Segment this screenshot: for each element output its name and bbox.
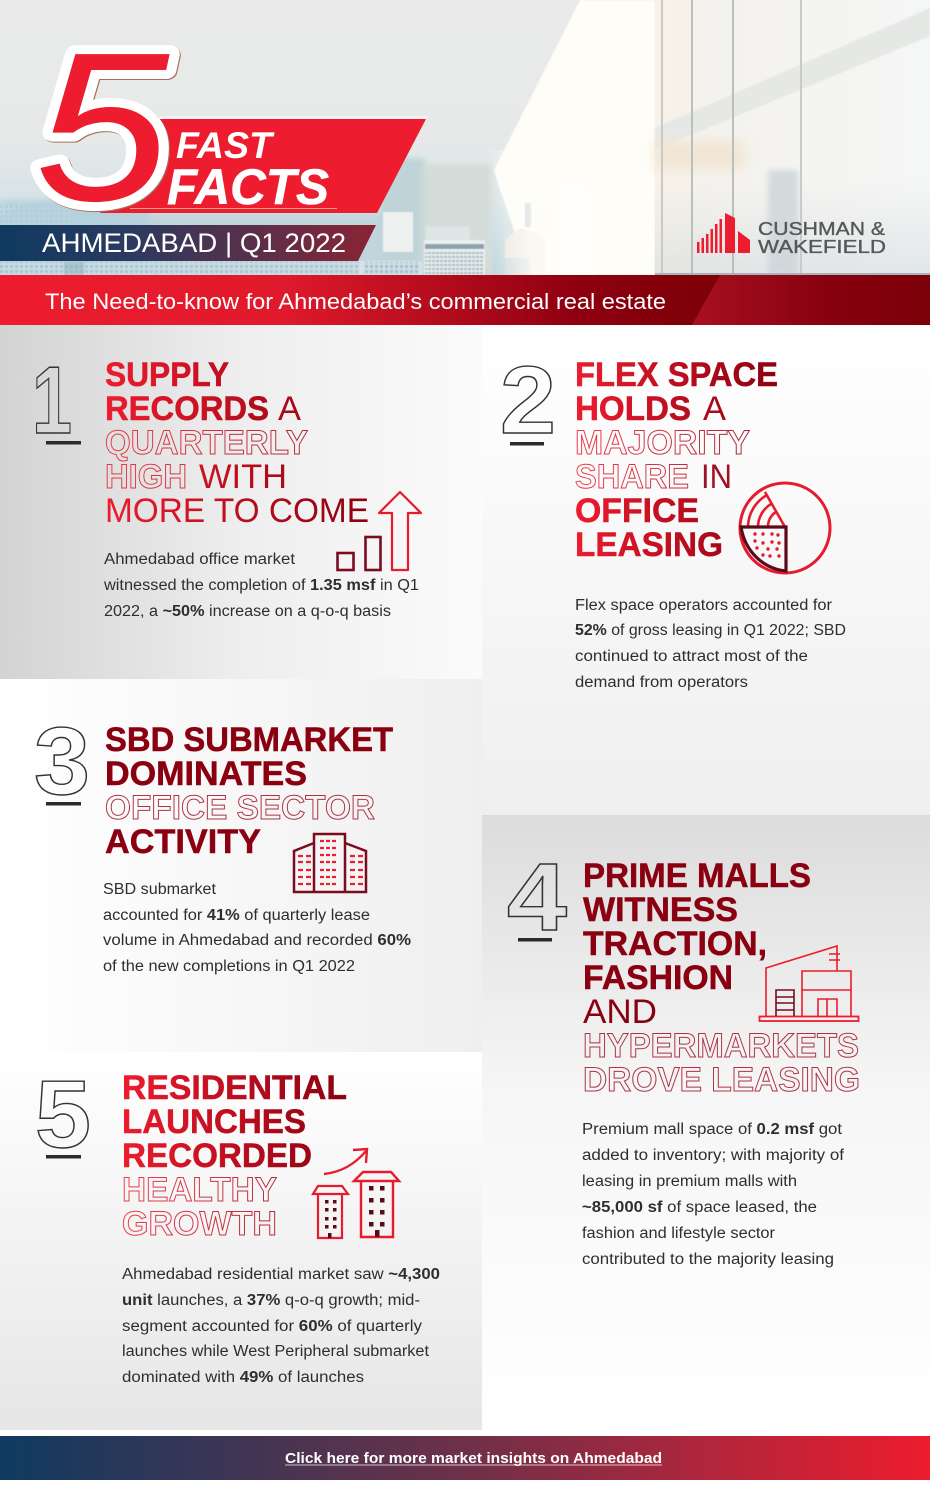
ribbon highlight [158, 116, 428, 119]
body text: leasing in premium malls with [582, 1173, 797, 1190]
heading: HIGH [105, 458, 187, 496]
heading: fast: FAST [176, 125, 275, 166]
heading: SHARE [575, 458, 689, 496]
heading: PRIME MALLS [583, 857, 811, 895]
number 4: 4 [507, 844, 567, 951]
heading: HYPERMARKETS [583, 1027, 859, 1065]
panel: fact 5 [0, 1052, 482, 1430]
subtitle bar: The Need-to-know for Ahmedabad’s commercial real estate [45, 289, 666, 314]
ribbon rule [130, 208, 337, 209]
heading: A [278, 390, 301, 428]
heading: FASHION [583, 959, 733, 997]
body text: 52% of gross leasing in Q1 2022; SBD [575, 622, 846, 639]
sunlit diagonal wall [494, 0, 655, 275]
body text: Premium mall space of 0.2 msf got [582, 1121, 843, 1138]
heading: ACTIVITY [105, 823, 261, 861]
city and quarter band: AHMEDABAD | Q1 2022 [42, 228, 346, 258]
number 5: 5 [35, 1061, 91, 1168]
body text: continued to attract most of the [575, 648, 808, 665]
heading: WITNESS [583, 891, 738, 929]
heading: WITH [199, 458, 287, 496]
heading: OFFICE SECTOR [105, 789, 375, 827]
body text: Flex space operators accounted for [575, 597, 832, 614]
heading: FLEX SPACE [575, 356, 778, 394]
heading: HOLDS [575, 390, 691, 428]
body text: Ahmedabad office market [104, 551, 296, 568]
big numeral 5: 5 [35, 8, 170, 245]
heading [583, 857, 860, 1099]
logo: cushman and wakefield [697, 213, 886, 257]
number 2: 2 [500, 347, 556, 454]
icon: office building [294, 834, 366, 892]
heading: facts: FACTS [167, 159, 329, 215]
heading: DOMINATES [105, 755, 307, 793]
body text: accounted for 41% of quarterly lease [103, 907, 370, 924]
heading: QUARTERLY [105, 424, 308, 462]
heading [105, 356, 369, 530]
body text: 2022, a ~50% increase on a q-o-q basis [104, 603, 391, 620]
body text: fashion and lifestyle sector [582, 1225, 775, 1242]
red ribbon [100, 119, 426, 213]
city and quarter band [0, 225, 376, 261]
heading [122, 1069, 347, 1243]
heading: IN [701, 458, 732, 496]
body text [575, 597, 846, 691]
office window wall [655, 0, 930, 275]
heading: LAUNCHES [122, 1103, 306, 1141]
sun fade [485, 150, 565, 275]
icon: pie chart [740, 483, 830, 573]
icon: rising bars and arrow [338, 492, 421, 570]
heading: RESIDENTIAL [122, 1069, 347, 1107]
body text: segment accounted for 60% of quarterly [122, 1318, 422, 1335]
heading: HEALTHY [122, 1171, 277, 1209]
panel: fast facts badge [35, 8, 428, 246]
heading: RECORDED [122, 1137, 312, 1175]
logo mark [697, 213, 750, 253]
heading [105, 721, 393, 861]
body text: unit launches, a 37% q-o-q growth; mid- [122, 1292, 420, 1309]
body text [582, 1121, 845, 1268]
body text [103, 551, 419, 620]
panel: fact 4 [482, 815, 930, 1430]
body text: volume in Ahmedabad and recorded 60% [103, 932, 411, 949]
body text: of the new completions in Q1 2022 [103, 958, 355, 975]
body text: launches while West Peripheral submarket [122, 1343, 430, 1360]
body text: Ahmedabad residential market saw ~4,300 [122, 1266, 440, 1283]
heading [575, 356, 778, 564]
body text: contributed to the majority leasing [582, 1251, 834, 1268]
panel: header photo [0, 0, 930, 275]
near skyline [0, 198, 550, 275]
heading: MAJORITY [575, 424, 750, 462]
numeral 5 shadow: 5 [36, 9, 171, 246]
body text: witnessed the completion of 1.35 msf in Q1 [103, 577, 419, 594]
heading: SUPPLY [105, 356, 229, 394]
footer link bar: Click here for more market insights on Ahmedabad [285, 1450, 662, 1467]
logo: cushman and wakefield: WAKEFIELD [758, 237, 886, 257]
number 3: 3 [34, 708, 90, 815]
footer link bar [0, 1436, 930, 1480]
body text [122, 1266, 440, 1386]
heading: RECORDS [105, 390, 269, 428]
far skyline haze [0, 158, 492, 275]
body text: dominated with 49% of launches [122, 1369, 364, 1386]
panel: fact 3 [0, 679, 482, 1052]
heading: AND [583, 993, 657, 1031]
body text [103, 881, 411, 975]
body text: SBD submarket [103, 881, 217, 898]
heading: SBD SUBMARKET [105, 721, 393, 759]
icon: residential towers with arrow [313, 1149, 399, 1238]
icon: storefront [760, 946, 858, 1021]
panel: fact 2 [482, 325, 930, 815]
heading: GROWTH [122, 1205, 277, 1243]
body text: ~85,000 sf of space leased, the [582, 1199, 817, 1216]
body text: added to inventory; with majority of [582, 1147, 845, 1164]
body text: demand from operators [575, 674, 748, 691]
panel: fact 1 [0, 325, 482, 679]
heading: DROVE LEASING [583, 1061, 860, 1099]
heading: OFFICE [575, 492, 699, 530]
subtitle bar [0, 275, 930, 325]
logo wordmark: CUSHMAN & [758, 219, 885, 239]
heading: LEASING [575, 526, 723, 564]
heading: TRACTION, [583, 925, 767, 963]
number 1: 1 [32, 347, 72, 454]
heading: A [703, 390, 726, 428]
heading: MORE TO COME [105, 492, 369, 530]
